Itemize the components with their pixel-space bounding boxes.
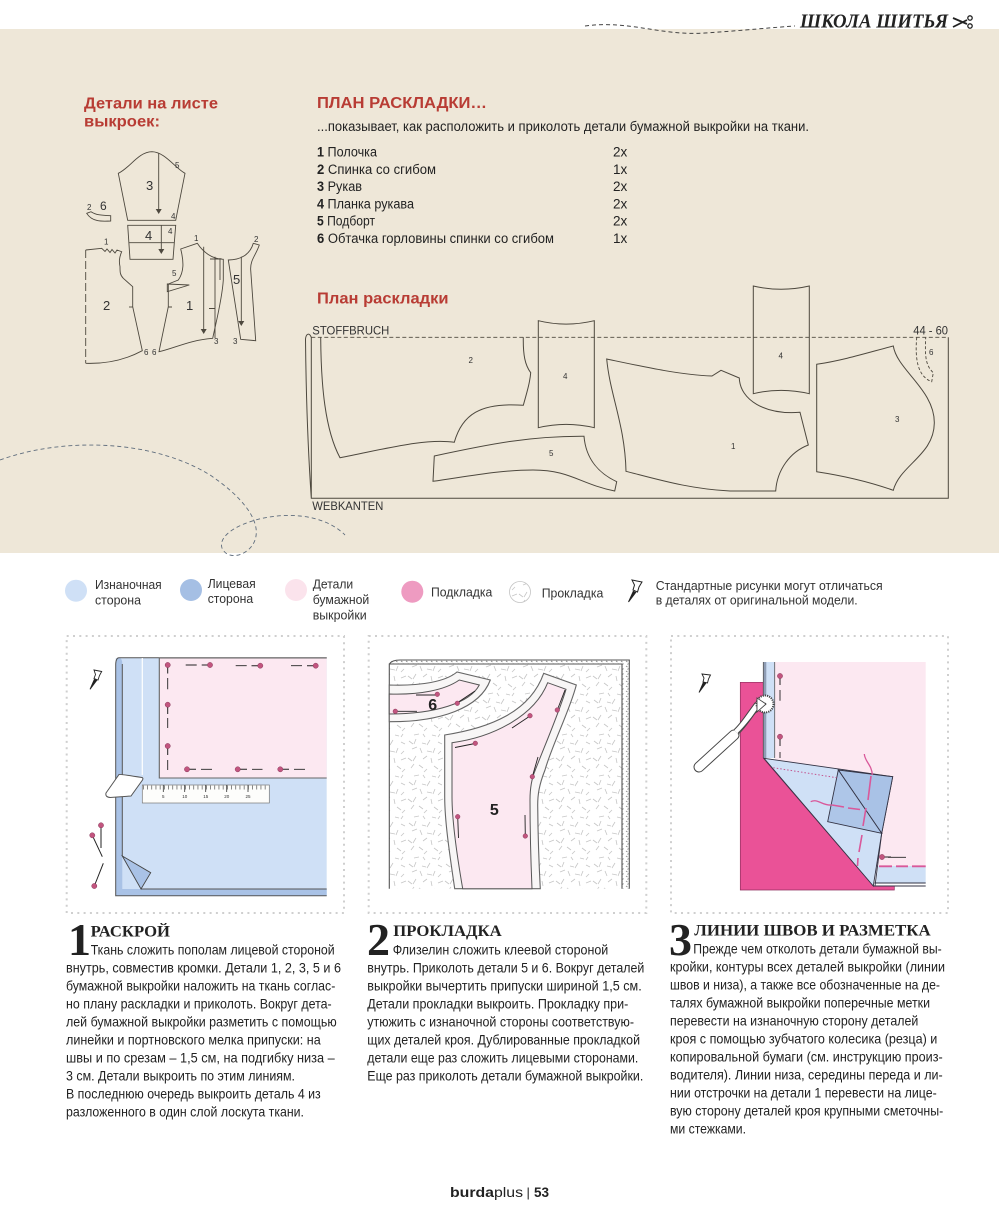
- piece 3 sleeve: [118, 152, 185, 221]
- step 1 text: линейки и портновского мелка припуски: на: [66, 1031, 321, 1047]
- layout piece 4 left: [538, 321, 594, 428]
- step 1 text: 1: [68, 914, 91, 965]
- piece 2 back: 2: [103, 298, 110, 313]
- piece 3 sleeve: 4: [171, 212, 176, 221]
- layout piece 1: [607, 359, 808, 491]
- layout piece 6: 6: [929, 348, 934, 357]
- decorative stitch line top: [585, 25, 795, 33]
- step 1 text: РАСКРОЙ: [91, 923, 170, 940]
- piece 1 front: 1: [194, 234, 199, 243]
- decorative stitch curve lower left: [0, 445, 345, 556]
- step 2 text: ПРОКЛАДКА: [393, 923, 503, 940]
- legend: paper pattern: [285, 578, 369, 622]
- icon: push pin note: [628, 580, 642, 602]
- step 2 text: утюжить с изнаночной стороны соответствую-: [367, 1013, 634, 1029]
- step 1 text: бумажной выкройки наложить на ткань соглас-: [66, 977, 336, 993]
- beige header panel: [0, 29, 999, 553]
- layout piece 3: [817, 346, 934, 490]
- step 1 text: швы и по срезам – 1,5 см, на подгибку низа –: [66, 1049, 335, 1065]
- legend: right side: Лицевая: [208, 577, 256, 591]
- step 2 text: детали еще раз сложить лицевыми сторонами.: [367, 1049, 638, 1065]
- fabric outline: [306, 323, 948, 513]
- footer: 53: [534, 1185, 550, 1200]
- layout piece 4 left: 4: [563, 372, 568, 381]
- step 3 text: нии отстрочки на детали 1 перевести на лице-: [670, 1084, 937, 1100]
- footer: |: [526, 1185, 530, 1200]
- piece 2 back: 1: [104, 238, 109, 246]
- step 3 text: талях бумажной выкройки поперечные метки: [670, 994, 930, 1010]
- diagram: pieces on pattern sheet: [86, 152, 259, 363]
- step 3 text: Прежде чем отколоть детали бумажной вы-: [693, 940, 942, 956]
- intro text: ...показывает, как расположить и приколоть детали бумажной выкройки на ткани.: [317, 119, 809, 134]
- step 2 text: 2: [367, 914, 390, 965]
- heading: pattern sheet pieces: Детали на листе: [84, 95, 218, 112]
- layout piece 4 right: 4: [778, 352, 784, 360]
- fabric fold: [764, 758, 926, 886]
- step 1 text: В последнюю очередь выкроить деталь 4 из: [66, 1085, 321, 1101]
- fabric outline: STOFFBRUCH: [312, 323, 389, 337]
- ruler: 10: [182, 794, 188, 799]
- step 2 text: выкройки вычертить припуски шириной 1,5 см.: [367, 977, 642, 993]
- section title: школа шитья: ШКОЛА ШИТЬЯ: [799, 10, 949, 32]
- step 3 text: ми стежками.: [670, 1120, 746, 1136]
- paper pattern: [775, 662, 926, 867]
- step 2 text: щих деталей кроя. Дублированные прокладкой: [367, 1031, 640, 1047]
- heading: pattern sheet pieces: [84, 95, 218, 130]
- parts list: 1x: [613, 162, 628, 177]
- step 3 text: копировальной бумаги (см. инструкцию произ-: [670, 1048, 943, 1064]
- heading: layout plan: ПЛАН РАСКЛАДКИ…: [317, 95, 487, 112]
- icon: push pin: [90, 670, 102, 689]
- legend: paper pattern: Детали: [313, 578, 353, 592]
- piece 5 facing: 5: [233, 272, 240, 287]
- step 2 text: [367, 914, 644, 1083]
- legend note: [656, 579, 883, 608]
- blue strip: [763, 662, 775, 758]
- piece 2 back: 6: [152, 348, 157, 357]
- fabric: [116, 658, 327, 896]
- tailor's chalk: [106, 774, 143, 798]
- layout piece 1: 1: [731, 442, 736, 451]
- ruler: 25: [245, 794, 251, 799]
- icon: scissors: [953, 16, 972, 28]
- piece 1 front: 3: [214, 337, 219, 346]
- step 1 text: разложенного в один слой лоскута ткани.: [66, 1103, 304, 1119]
- parts list: 2x: [613, 214, 628, 228]
- step 1 text: но плану раскладки и приколоть. Вокруг дета-: [66, 995, 332, 1011]
- ruler: 5: [162, 794, 165, 799]
- interfacing fabric: [389, 660, 629, 889]
- layout piece 6: [916, 337, 934, 382]
- step 3 text: водителя). Линии низа, середины переда и ли-: [670, 1066, 943, 1082]
- magenta lining: [740, 682, 894, 890]
- layout piece 4 right: [753, 286, 809, 394]
- parts list: 6 Обтачка горловины спинки со сгибом: [317, 231, 554, 246]
- step 3 text: швов и низа), а также все обозначенные на де-: [670, 976, 940, 992]
- footer: burda plus: [450, 1185, 523, 1200]
- step 1 text: Ткань сложить пополам лицевой стороной: [91, 941, 335, 957]
- tracing wheel: [699, 696, 774, 767]
- ruler: 20: [224, 794, 230, 799]
- legend: wrong side: [65, 578, 162, 607]
- piece 4 cuff: 4: [145, 228, 152, 243]
- icon: push pin: [699, 674, 710, 692]
- diagram: cutting layout: [306, 286, 948, 513]
- parts list: 2 Спинка со сгибом: [317, 162, 436, 177]
- piece 3 sleeve: 3: [146, 178, 153, 193]
- heading: layout plan diagram: План раскладки: [317, 290, 448, 307]
- parts list: 4 Планка рукава: [317, 196, 414, 212]
- piece 6: 6: [428, 697, 437, 714]
- step 2 text: внутрь. Приколоть детали 5 и 6. Вокруг деталей: [367, 959, 644, 975]
- paper pattern: [159, 658, 327, 778]
- loose pins: [90, 823, 104, 889]
- step 2 text: Флизелин сложить клеевой стороной: [393, 941, 608, 957]
- parts list: [317, 144, 628, 246]
- footer: [450, 1185, 550, 1200]
- fabric outline: WEBKANTEN: [312, 499, 383, 513]
- parts list: 2x: [613, 179, 628, 194]
- layout piece 2: 2: [468, 356, 474, 365]
- legend note: Стандартные рисунки могут отличаться: [656, 579, 883, 593]
- parts list: 2x: [613, 196, 628, 212]
- piece 1 front: [159, 234, 223, 352]
- legend: lining: Подкладка: [431, 586, 492, 600]
- legend note: в деталях от оригинальной модели.: [656, 594, 858, 608]
- fabric outline: 44 - 60: [913, 323, 948, 337]
- legend: right side: сторона: [208, 592, 253, 606]
- parts list: 2x: [613, 144, 628, 160]
- pins: [165, 662, 318, 772]
- step 3 text: вую сторону деталей кроя крупными сметочны-: [670, 1102, 944, 1118]
- parts list: 1x: [613, 231, 628, 246]
- piece 6 facing: [87, 199, 111, 221]
- piece 4 cuff: 4: [168, 227, 173, 236]
- piece 6 facing: 6: [100, 199, 107, 213]
- piece 1 front: 1: [186, 298, 193, 313]
- step 2 text: Еще раз приколоть детали бумажной выкройки.: [367, 1067, 643, 1083]
- legend: wrong side: Изнаночная: [95, 578, 162, 592]
- parts list: 3 Рукав: [317, 179, 362, 194]
- heading: pattern sheet pieces: выкроек:: [84, 114, 160, 130]
- step 3 text: кройки, контуры всех деталей выкройки (линии: [670, 958, 945, 974]
- pins: [777, 673, 906, 860]
- panel: step 1 illustration: [67, 636, 344, 913]
- piece 3 sleeve: 5: [175, 161, 180, 170]
- panel: step 2 illustration: [369, 636, 646, 913]
- step 1 text: [66, 914, 341, 1119]
- step 3 text: кроя с помощью зубчатого колесика (резца) и: [670, 1030, 937, 1046]
- layout piece 5: [433, 436, 617, 491]
- parts list: 5 Подборт: [317, 214, 375, 228]
- step 1 text: 3 см. Детали выкроить по этим линиям.: [66, 1067, 295, 1083]
- legend: paper pattern: бумажной: [313, 593, 369, 607]
- piece 5 facing: 2: [254, 235, 259, 244]
- piece 5: [445, 673, 576, 889]
- parts list: 1 Полочка: [317, 144, 377, 160]
- piece 6: [389, 672, 490, 722]
- legend: interfacing: [510, 582, 603, 602]
- legend: [65, 577, 883, 622]
- layout piece 3: 3: [895, 415, 900, 424]
- piece 5 facing: [228, 235, 259, 346]
- step 1 text: внутрь, совместив кромки. Детали 1, 2, 3, 5 и 6: [66, 959, 341, 975]
- step 1 text: лей бумажной выкройки разметить с помощью: [66, 1013, 337, 1029]
- piece 2 back: [86, 238, 157, 363]
- step 3 text: ЛИНИИ ШВОВ И РАЗМЕТКА: [694, 923, 932, 940]
- ruler: [142, 785, 269, 803]
- step 3 text: [669, 914, 945, 1136]
- legend: wrong side: сторона: [95, 593, 141, 607]
- step 3 text: перевести на изнаночную сторону деталей: [670, 1012, 918, 1028]
- panel: step 3 illustration: [671, 636, 948, 913]
- legend: paper pattern: выкройки: [313, 608, 367, 622]
- tracing marks: [811, 754, 926, 866]
- step 2 text: Детали прокладки выкроить. Прокладку при-: [367, 995, 629, 1011]
- piece 5: 5: [490, 802, 499, 819]
- layout piece 5: 5: [549, 449, 554, 458]
- piece 5 facing: 3: [233, 337, 238, 346]
- legend: right side: [180, 577, 256, 606]
- legend: interfacing: Прокладка: [542, 586, 603, 600]
- piece 6 facing: 2: [87, 203, 92, 212]
- piece 1 front: 5: [172, 269, 177, 278]
- piece 4 cuff: [128, 225, 176, 259]
- step 3 text: 3: [669, 914, 692, 965]
- ruler: 15: [203, 794, 209, 799]
- legend: lining: [401, 581, 492, 603]
- piece 2 back: 6: [144, 348, 149, 357]
- layout piece 2: [321, 337, 531, 458]
